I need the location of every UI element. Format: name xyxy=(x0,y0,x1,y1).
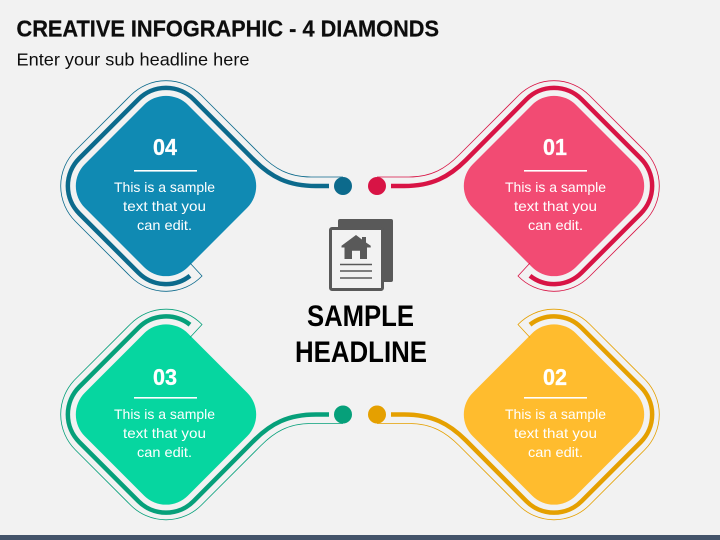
footer bar xyxy=(0,535,720,540)
divider: 02 xyxy=(524,397,587,399)
center headline: SAMPLE xyxy=(307,300,414,333)
number: 02: 02 xyxy=(543,364,567,390)
panel: 04 blue diamond xyxy=(61,81,352,291)
panel: 03 green diamond xyxy=(61,309,352,520)
text: 01: can edit. xyxy=(528,217,583,233)
panel: 01 red diamond xyxy=(368,81,659,291)
number: 01: 01 xyxy=(543,134,567,160)
diamond and connector: 04 xyxy=(61,81,352,291)
center headline: HEADLINE xyxy=(295,336,427,369)
icon: house document xyxy=(330,219,393,290)
divider: 03 xyxy=(134,397,197,399)
text: 02: can edit. xyxy=(528,444,583,460)
text: 01: This is a sample xyxy=(505,179,606,195)
text: 02: This is a sample xyxy=(505,406,606,422)
text: 01 xyxy=(505,179,606,233)
title: CREATIVE INFOGRAPHIC - 4 DIAMONDS xyxy=(16,16,439,42)
number: 03: 03 xyxy=(153,364,177,390)
text: 03: This is a sample xyxy=(114,406,215,422)
diamond and connector: 03 xyxy=(61,309,352,520)
text: 01: text that you xyxy=(514,198,597,214)
divider: 01 xyxy=(524,170,587,172)
text: 02 xyxy=(505,406,606,460)
subtitle: Enter your sub headline here xyxy=(16,50,250,70)
panel: 02 yellow diamond xyxy=(368,309,659,520)
text: 04 xyxy=(114,179,215,233)
diamond and connector: 02 xyxy=(368,309,659,520)
diamond and connector: 01 xyxy=(368,81,659,291)
number: 04: 04 xyxy=(153,134,177,160)
divider: 04 xyxy=(134,170,197,172)
text: 03: text that you xyxy=(123,425,206,441)
text: 04: can edit. xyxy=(137,217,192,233)
text: 02: text that you xyxy=(514,425,597,441)
text: 04: This is a sample xyxy=(114,179,215,195)
text: 03: can edit. xyxy=(137,444,192,460)
text: 04: text that you xyxy=(123,198,206,214)
text: 03 xyxy=(114,406,215,460)
center headline xyxy=(295,300,427,369)
